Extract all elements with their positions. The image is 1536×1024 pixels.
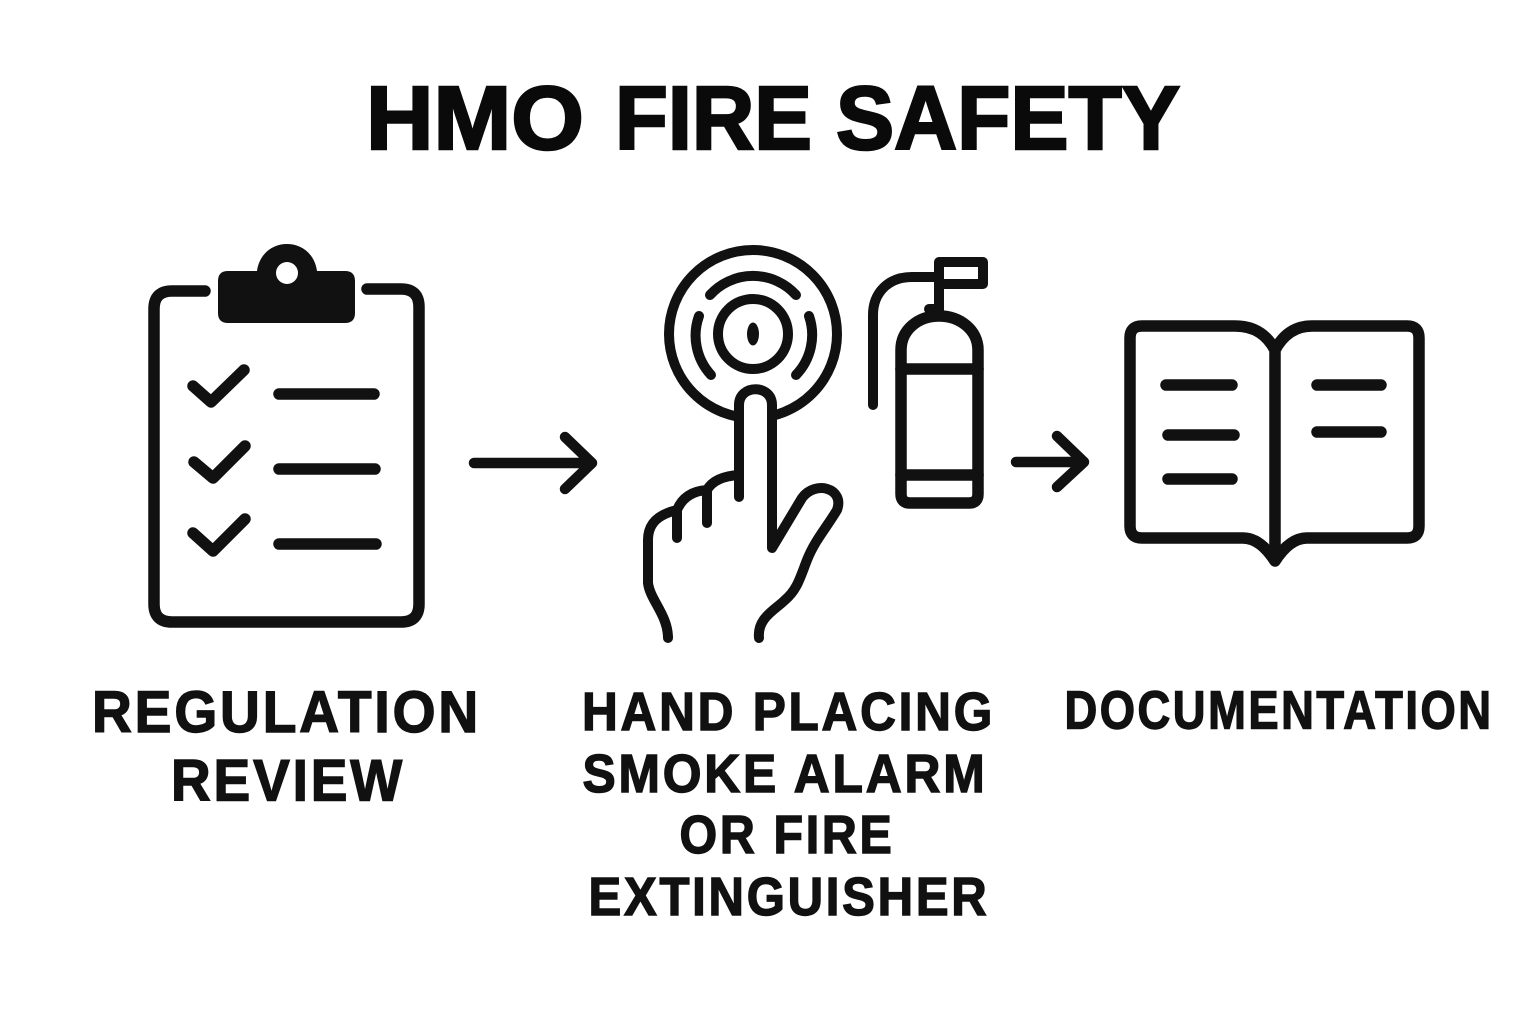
label: hand placing smoke alarm or fire extinguisher: EXTINGUISHER (588, 867, 990, 927)
title: HMO (366, 69, 584, 169)
label: hand placing smoke alarm or fire extinguisher: SMOKE ALARM (582, 744, 988, 804)
label: regulation review (92, 680, 481, 814)
label: regulation review: REVIEW (171, 748, 405, 814)
icon: open book (1130, 326, 1419, 561)
arrow: to documentation step (1016, 436, 1084, 487)
title: FIRE (615, 69, 812, 169)
label: hand placing smoke alarm or fire extinguisher: OR FIRE (680, 805, 894, 865)
arrow: to alarm step (474, 437, 592, 489)
icon: clipboard checklist (154, 244, 419, 622)
icon: hand pressing smoke alarm (648, 250, 838, 638)
label: hand placing smoke alarm or fire extinguisher (582, 682, 995, 927)
icon: fire extinguisher (873, 262, 983, 503)
label: hand placing smoke alarm or fire extinguisher: HAND PLACING (582, 682, 995, 742)
title: SAFETY (836, 69, 1180, 169)
label: regulation review: REGULATION (92, 680, 481, 745)
